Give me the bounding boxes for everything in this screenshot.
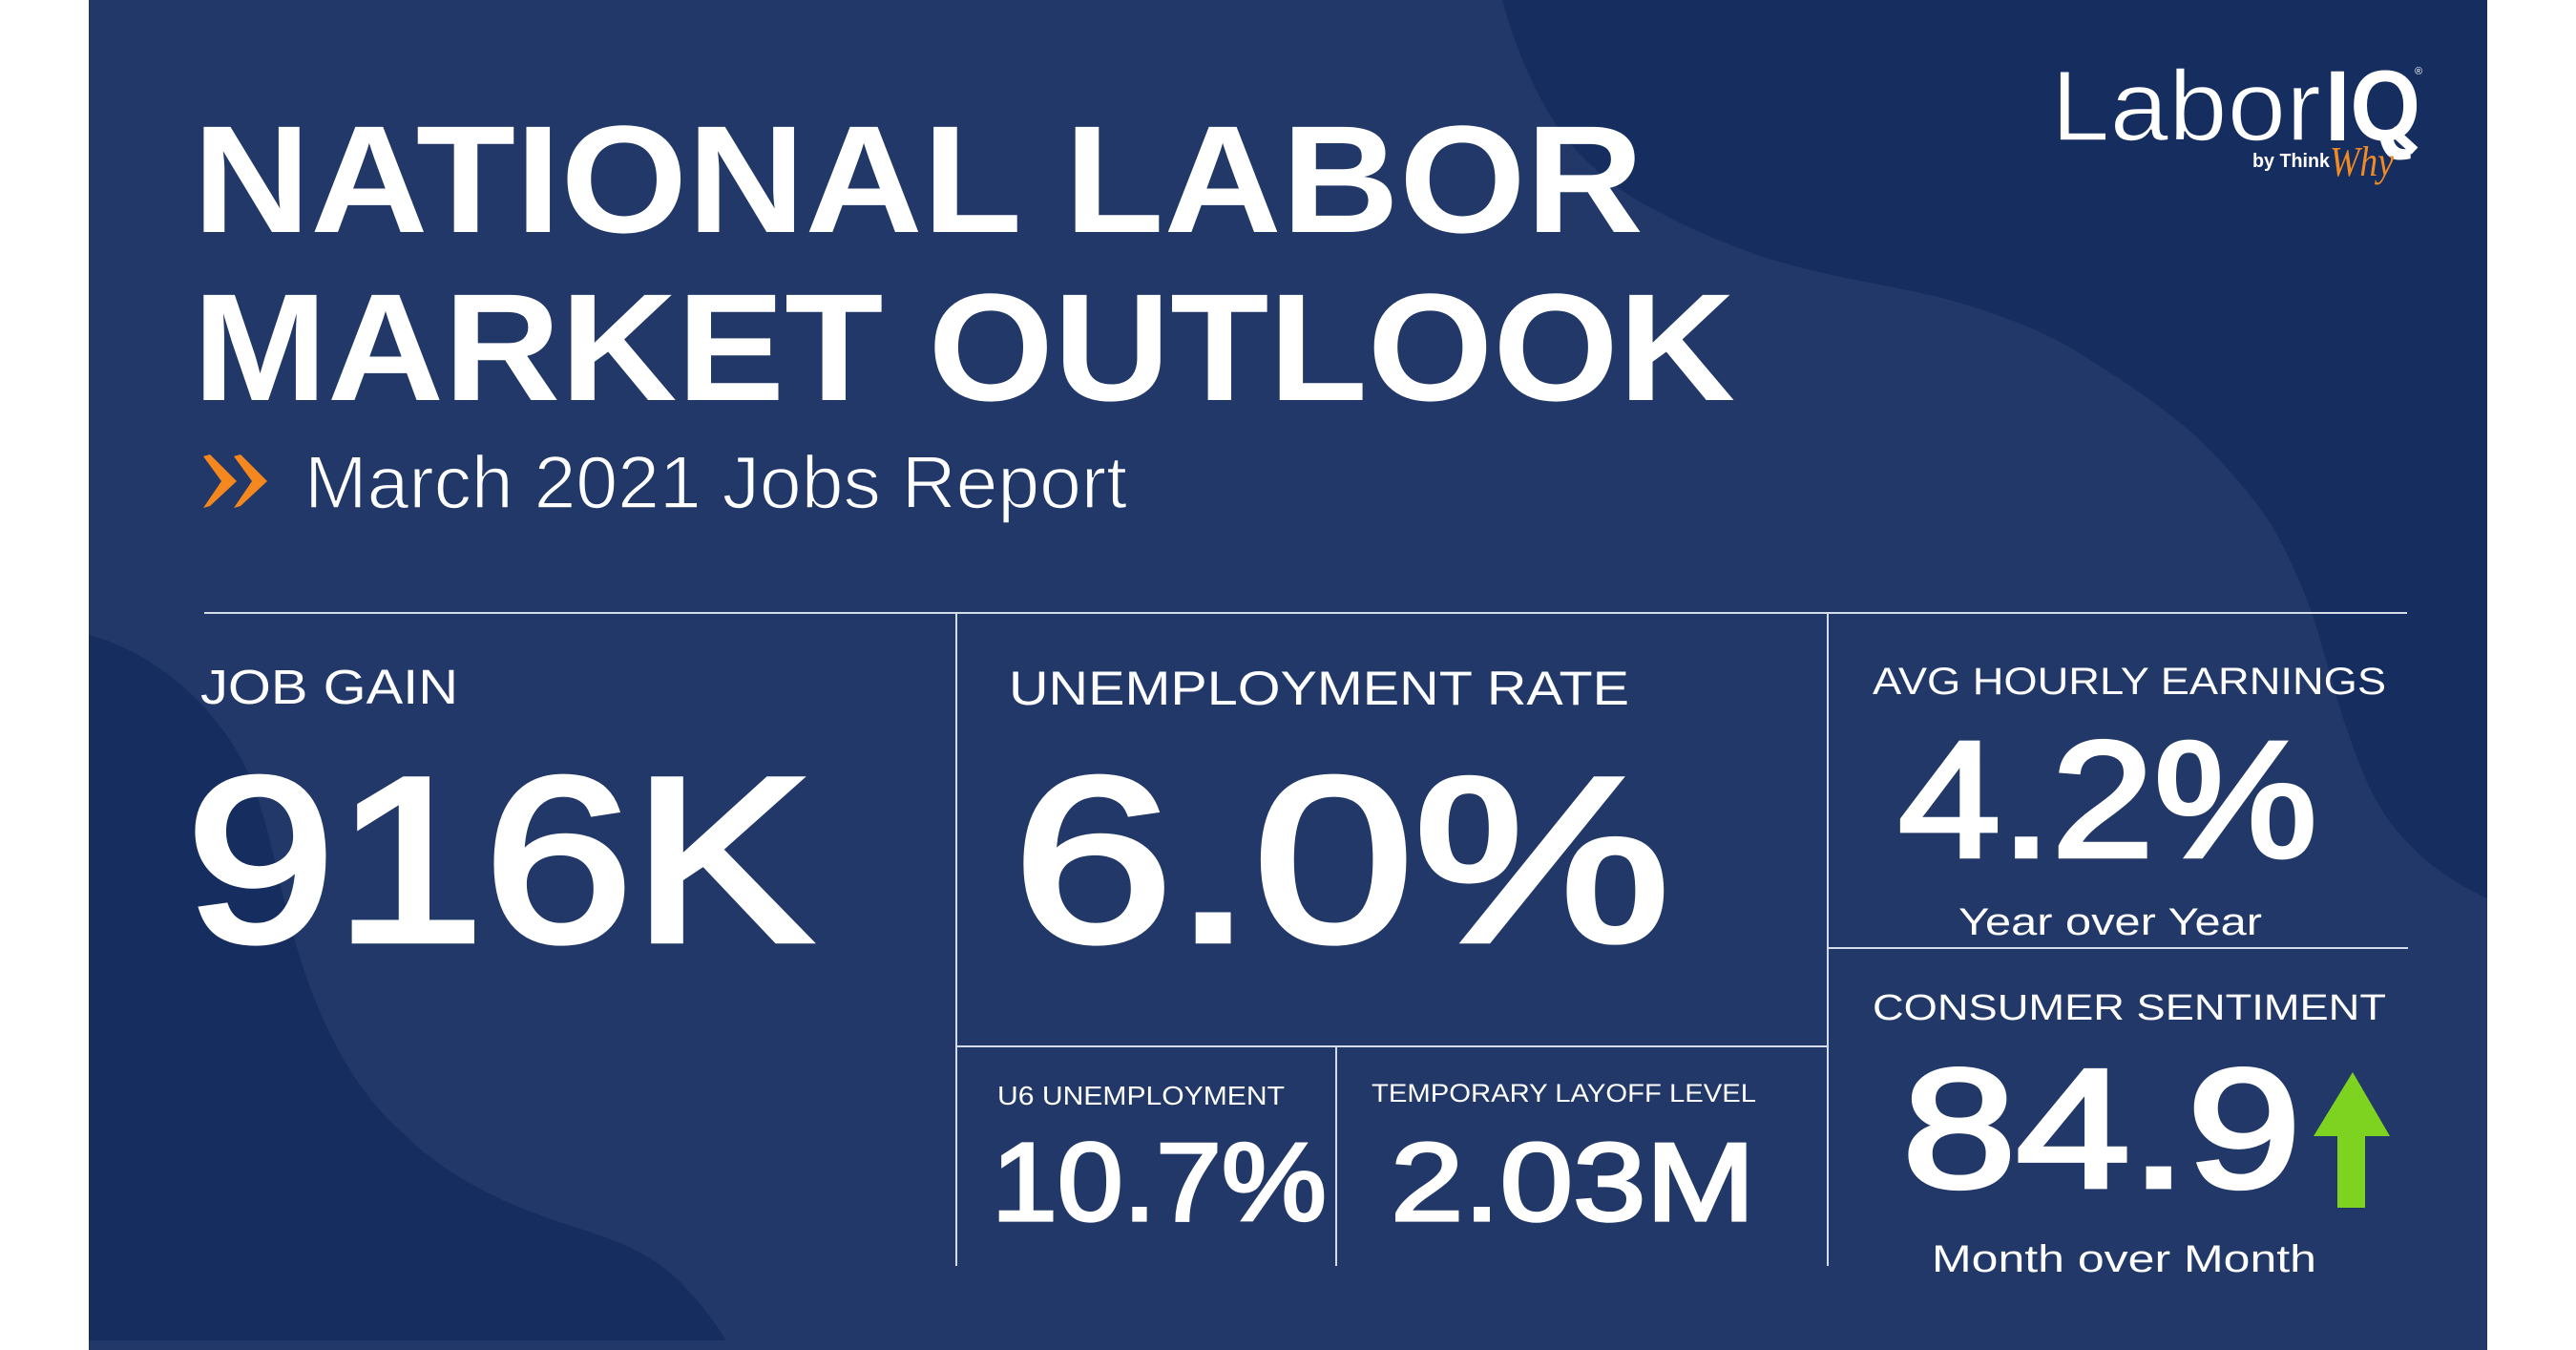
label: job gain: JOB GAIN <box>200 660 458 714</box>
title <box>193 94 1735 432</box>
logo: LaborIQ by ThinkWhy <box>2051 51 2422 185</box>
logo: LaborIQ by ThinkWhy: ® <box>2415 66 2422 77</box>
value: 916K: 916K <box>186 728 811 990</box>
panel: U6 unemployment <box>992 1081 1327 1244</box>
value: 10.7%: 10.7% <box>992 1120 1327 1244</box>
icon: orange double chevron <box>203 454 267 508</box>
logo: LaborIQ by ThinkWhy: by Think <box>2252 151 2331 172</box>
label: avg hourly earnings: AVG HOURLY EARNINGS <box>1873 661 2386 703</box>
panel: unemployment rate <box>1009 662 1670 990</box>
caption: month over month: Month over Month <box>1932 1238 2316 1280</box>
value: 84.9: 84.9 <box>1902 1034 2301 1223</box>
value: 2.03M: 2.03M <box>1391 1120 1755 1244</box>
background blob: bottom left <box>89 635 726 1340</box>
label: temporary layoff level: TEMPORARY LAYOFF LEVEL <box>1372 1079 1756 1107</box>
title: NATIONAL LABOR <box>193 94 1644 264</box>
label: U6 unemployment: U6 UNEMPLOYMENT <box>997 1081 1285 1110</box>
caption: year over year: Year over Year <box>1958 901 2262 943</box>
subtitle: March 2021 Jobs Report <box>304 440 1127 524</box>
value: 4.2%: 4.2% <box>1898 707 2317 892</box>
icon: green up arrow <box>2314 1072 2390 1208</box>
logo: LaborIQ by ThinkWhy: Why <box>2330 138 2394 185</box>
logo: LaborIQ by ThinkWhy: Labor <box>2051 51 2321 162</box>
panel: job gain <box>186 660 811 990</box>
panel: temporary layoff level <box>1372 1079 1756 1244</box>
label: unemployment rate: UNEMPLOYMENT RATE <box>1009 662 1629 715</box>
value: 6.0%: 6.0% <box>1013 728 1670 990</box>
background blob: top right <box>1502 0 2487 898</box>
panel: average hourly earnings <box>1873 661 2386 943</box>
panel: consumer sentiment <box>1873 988 2390 1280</box>
logo: LaborIQ by ThinkWhy: IQ <box>2325 51 2420 162</box>
title: MARKET OUTLOOK <box>193 262 1735 432</box>
label: consumer sentiment: CONSUMER SENTIMENT <box>1873 988 2386 1028</box>
